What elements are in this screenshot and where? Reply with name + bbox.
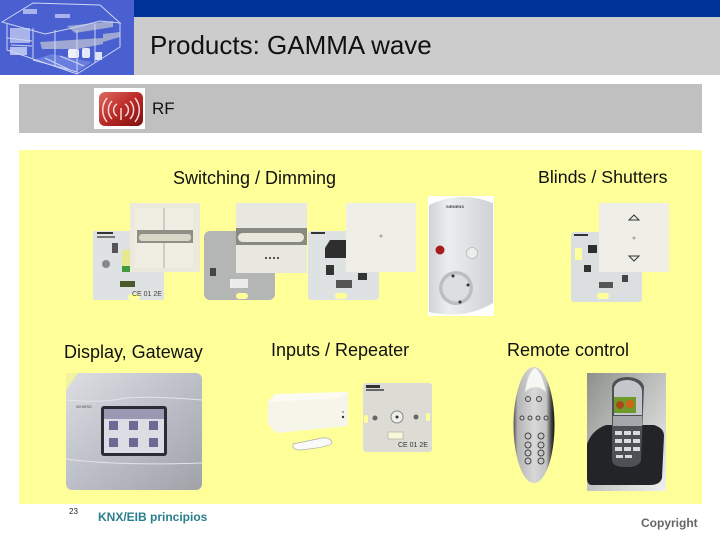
product: remote control — [514, 367, 554, 483]
heading: inputs: Inputs / Repeater — [271, 340, 409, 360]
product: touch display: SIEMENS — [76, 405, 92, 409]
product: dimmer with display — [204, 203, 307, 300]
heading: display: Display, Gateway — [64, 342, 203, 362]
icon: house cutaway — [0, 0, 134, 75]
footer: course title: KNX/EIB principios — [98, 510, 208, 524]
footer: page number: 23 — [69, 507, 78, 516]
panel: RF bar — [19, 84, 702, 133]
header bar — [134, 0, 720, 75]
footer: copyright: Copyright — [641, 516, 698, 530]
product: door sensor — [268, 392, 348, 450]
product: cordless phone — [587, 373, 666, 491]
icon: RF antenna — [94, 88, 145, 129]
product: four-button switch: CE 01 2E — [132, 291, 162, 298]
heading: switching: Switching / Dimming — [173, 168, 336, 188]
panel: products — [19, 150, 702, 504]
RF label: RF — [152, 99, 175, 118]
product: plain dimmer — [308, 203, 416, 300]
product: touch display — [66, 373, 202, 490]
product: blinds switch — [571, 203, 669, 302]
product: socket plug — [428, 196, 494, 316]
heading: remote: Remote control — [507, 340, 629, 360]
product: input module: CE 01 2E — [398, 442, 428, 449]
title: Products: GAMMA wave — [150, 30, 432, 60]
product: input module — [363, 383, 432, 452]
heading: blinds: Blinds / Shutters — [538, 167, 668, 187]
product: four-button switch — [93, 203, 200, 300]
product: socket plug: SIEMENS — [446, 204, 464, 209]
